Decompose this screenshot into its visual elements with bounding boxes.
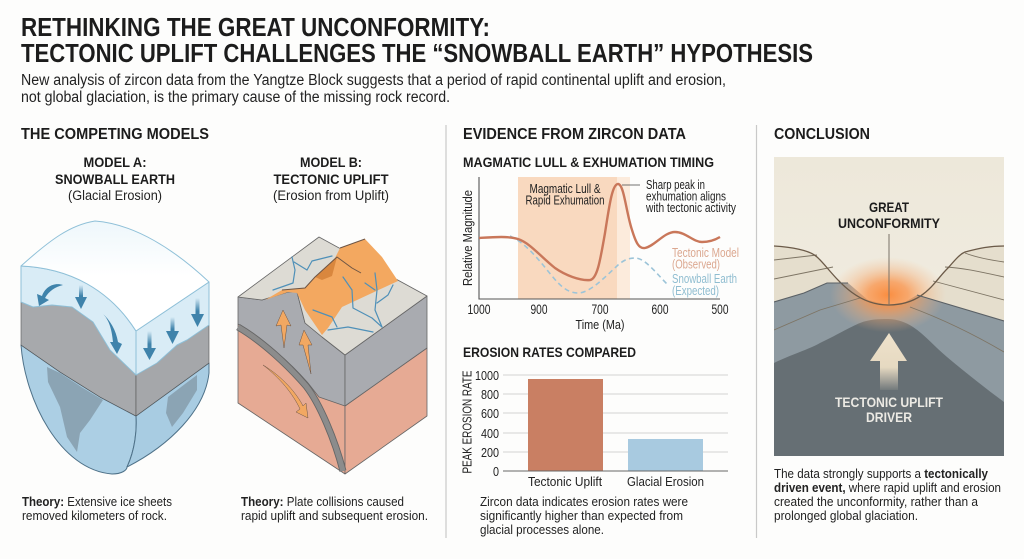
panel: conclusion: [774, 126, 1004, 523]
orange glow: [834, 260, 940, 330]
tectonic model observed curve: [479, 184, 720, 280]
peak annotation: exhumation aligns: [646, 190, 726, 204]
conclusion text: prolonged global glaciation.: [774, 509, 918, 523]
bar labels: Tectonic Uplift: [528, 474, 602, 489]
strata lines: [774, 253, 1004, 352]
conclusion text: The data strongly supports a tectonically: [774, 467, 988, 481]
diagram: great unconformity cross-section: [774, 157, 1004, 456]
zircon summary text: significantly higher than expected from: [480, 508, 683, 523]
legend: tectonic model: (Observed): [672, 258, 720, 272]
dark basement: [774, 319, 1004, 456]
bar: tectonic uplift: [528, 379, 603, 471]
model B heading: [273, 155, 389, 203]
subtitle: New analysis of zircon data from the Yangtze Block suggests that a period of rapid continental uplift and erosion,: [21, 72, 726, 89]
model A theory text: removed kilometers of rock.: [22, 509, 167, 523]
zircon summary text: Zircon data indicates erosion rates were: [480, 494, 688, 509]
subtitle: not global glaciation, is the primary cause of the missing rock record.: [21, 89, 450, 106]
beige strata: [774, 246, 1004, 320]
conclusion text: [774, 467, 1001, 523]
snowball earth expected curve: [510, 236, 668, 293]
peak annotation: [645, 178, 737, 215]
label: tectonic uplift driver: DRIVER: [866, 410, 912, 425]
y axis ticks: 200: [481, 446, 499, 460]
model B heading: (Erosion from Uplift): [273, 188, 389, 203]
ice sheet: [21, 221, 209, 375]
heading: conclusion: CONCLUSION: [774, 126, 870, 143]
y axis ticks: 800: [481, 388, 499, 402]
title: TECTONIC UPLIFT CHALLENGES THE “SNOWBALL EARTH” HYPOTHESIS: [21, 40, 813, 68]
peak annotation leader: [622, 184, 640, 186]
band label: [526, 182, 605, 208]
peak annotation: Sharp peak in: [646, 178, 705, 192]
y axis ticks: 0: [493, 465, 499, 479]
axes: [479, 177, 720, 299]
y axis ticks: 600: [481, 407, 499, 421]
rock layer: [21, 302, 209, 416]
mantle faces: [238, 324, 427, 474]
x axis ticks: 600: [652, 302, 668, 317]
heading: the competing models: THE COMPETING MODELS: [21, 126, 209, 143]
shaded lull band: [518, 177, 630, 299]
heading: erosion rates: EROSION RATES COMPARED: [463, 344, 636, 360]
uplift arrows: [263, 310, 312, 418]
panel: the competing models: [21, 126, 428, 523]
unconformity boundary: [774, 246, 1004, 321]
model B theory text: Theory: Plate collisions caused: [241, 495, 404, 509]
x axis label: Time (Ma): [576, 317, 624, 332]
y axis label: Relative Magnitude: [460, 190, 475, 286]
peak annotation: with tectonic activity: [645, 201, 737, 215]
model B theory text: rapid uplift and subsequent erosion.: [241, 509, 428, 523]
model B heading: TECTONIC UPLIFT: [274, 172, 389, 187]
conclusion text: driven event, where rapid uplift and erosion: [774, 481, 1001, 495]
label: great unconformity: GREAT: [869, 199, 909, 215]
bar labels: [528, 474, 704, 489]
heading: magmatic lull chart: MAGMATIC LULL & EXHUMATION TIMING: [463, 154, 714, 170]
legend: snowball earth: [672, 272, 737, 298]
label: tectonic uplift driver: [835, 398, 943, 422]
legend: tectonic model: [672, 246, 739, 272]
ice flow arrows: [37, 284, 204, 360]
bar labels: Glacial Erosion: [627, 474, 704, 489]
title: [21, 14, 813, 68]
band label: Magmatic Lull &: [530, 182, 601, 196]
top surface: [238, 237, 427, 355]
zircon summary text: [480, 494, 688, 537]
model A theory text: [22, 495, 172, 523]
sky: [774, 157, 1004, 298]
rivers: [273, 256, 393, 332]
model B heading: MODEL B:: [300, 155, 362, 170]
x axis ticks: 1000: [468, 302, 490, 317]
model A theory text: Theory: Extensive ice sheets: [22, 495, 172, 509]
label: tectonic uplift driver: TECTONIC UPLIFT: [835, 395, 944, 410]
x axis ticks: [468, 302, 728, 317]
model A heading: (Glacial Erosion): [68, 188, 162, 203]
band label: Rapid Exhumation: [526, 194, 605, 208]
heading: evidence: EVIDENCE FROM ZIRCON DATA: [463, 126, 686, 143]
x axis ticks: 500: [712, 302, 728, 317]
diagram: snowball earth block: [21, 221, 209, 474]
sphere base: [21, 345, 209, 474]
label: great unconformity: [838, 202, 940, 228]
conclusion text: created the unconformity, rather than a: [774, 495, 978, 509]
y axis label: PEAK EROSION RATE: [460, 370, 474, 474]
model A heading: MODEL A:: [84, 155, 146, 170]
y axis ticks: [475, 369, 499, 479]
legend: snowball earth: (Expected): [672, 284, 719, 298]
model B theory text: [241, 495, 428, 523]
diagram: tectonic uplift block: [238, 237, 427, 474]
x axis ticks: 900: [530, 302, 548, 317]
zircon summary text: glacial processes alone.: [480, 522, 604, 537]
legend: tectonic model: Tectonic Model: [672, 246, 739, 260]
y axis ticks: 400: [481, 427, 499, 441]
bar: glacial erosion: [628, 439, 703, 471]
model A heading: SNOWBALL EARTH: [55, 172, 175, 187]
uplift arrow: [870, 333, 907, 390]
eroded mountains: [265, 239, 398, 335]
line chart: [460, 177, 739, 332]
subtitle: [21, 72, 726, 106]
pointer line: [888, 234, 890, 305]
legend: snowball earth: Snowball Earth: [672, 272, 737, 286]
bar chart: [460, 369, 728, 489]
crust faces: [238, 292, 427, 406]
model A heading: [55, 155, 175, 203]
label: great unconformity: UNCONFORMITY: [838, 215, 941, 231]
y axis ticks: 1000: [475, 369, 499, 383]
x axis ticks: 700: [592, 302, 608, 317]
panel: evidence from zircon data: [460, 126, 739, 537]
title: RETHINKING THE GREAT UNCONFORMITY:: [21, 14, 490, 42]
grey strata: [774, 283, 1004, 402]
subducting plate: [238, 327, 343, 471]
